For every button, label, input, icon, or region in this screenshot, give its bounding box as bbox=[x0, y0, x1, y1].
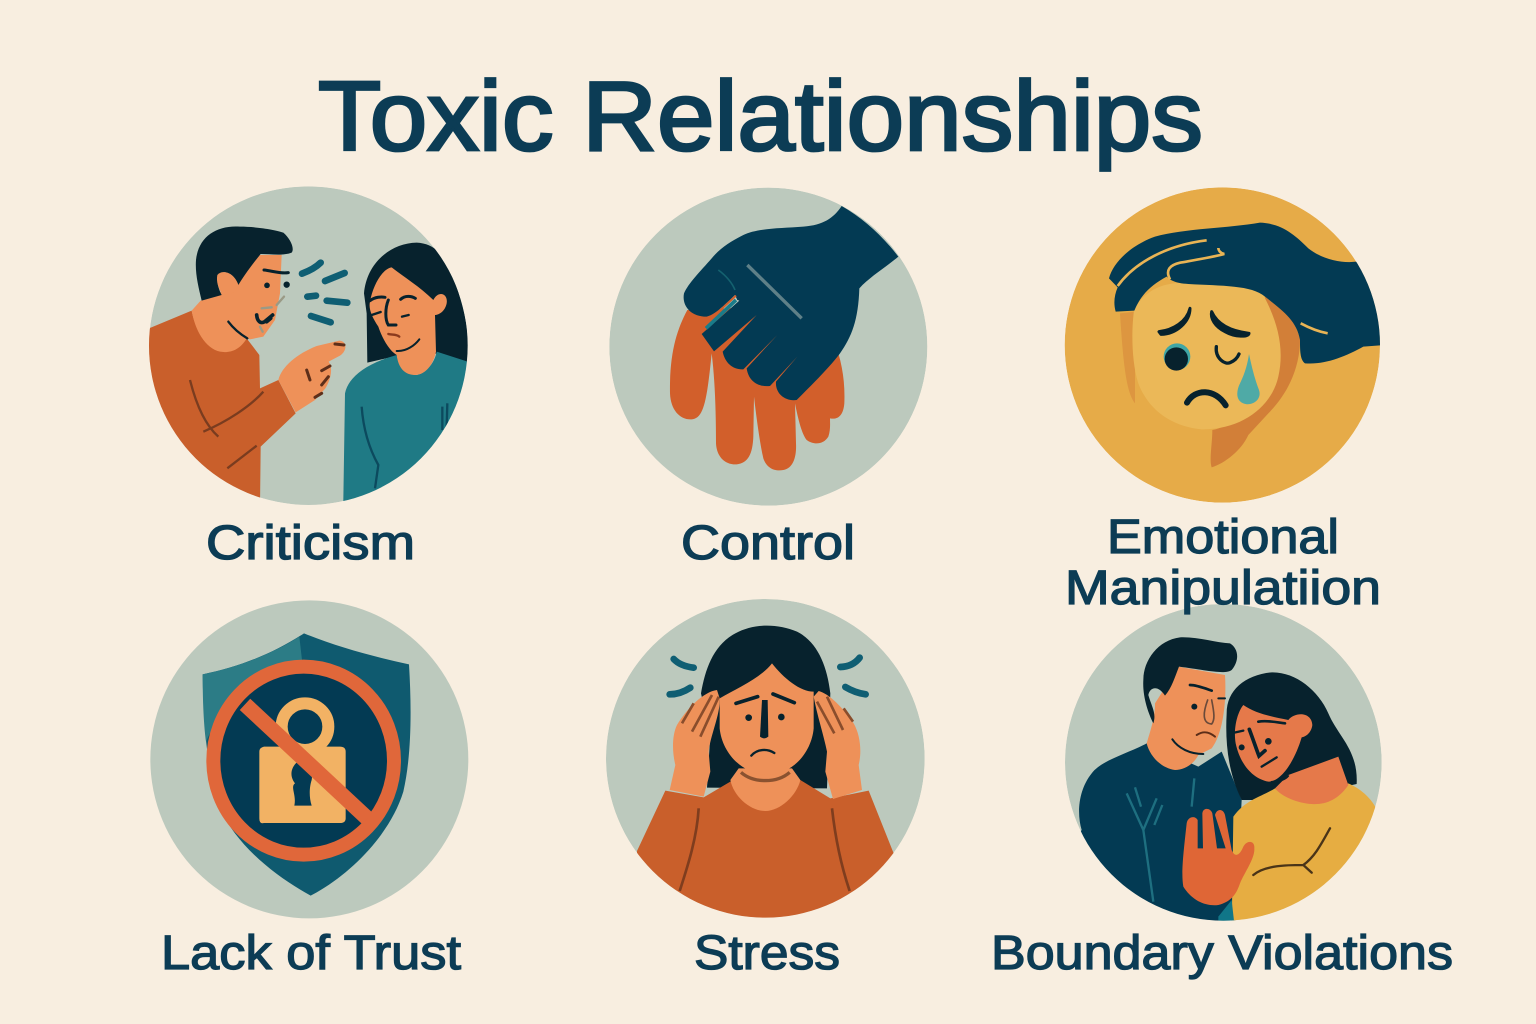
illustration: controlling hand over hand bbox=[609, 188, 927, 506]
finger lines bbox=[682, 695, 853, 737]
infographic canvas bbox=[149, 77, 1452, 980]
woman's shirt creases bbox=[362, 403, 447, 488]
man's hair bbox=[1143, 637, 1237, 723]
shield highlight bbox=[203, 637, 302, 742]
woman's face and neck bbox=[370, 267, 447, 375]
mouth bbox=[751, 750, 774, 756]
woman's features bbox=[1234, 721, 1288, 782]
jaw shadow bbox=[741, 772, 790, 781]
hand highlights bbox=[747, 265, 802, 318]
woman's hair bbox=[1226, 672, 1357, 800]
man's ear bbox=[217, 272, 238, 292]
man's sweater bbox=[1055, 743, 1242, 930]
panel: emotional manipulation bbox=[1065, 187, 1385, 615]
right hand bbox=[814, 691, 862, 799]
nose bbox=[760, 700, 768, 738]
brows bbox=[736, 694, 794, 703]
illustration: man pointing at woman bbox=[140, 186, 473, 508]
title: Toxic Relationships bbox=[318, 61, 1203, 171]
label: Lack of Trust bbox=[161, 927, 461, 980]
illustration: shield with crossed padlock bbox=[150, 600, 468, 918]
shirt creases bbox=[190, 380, 263, 468]
man's neck and face bbox=[1147, 667, 1225, 770]
teal shirt hem bbox=[1218, 900, 1235, 930]
woman's neck bbox=[1275, 757, 1348, 804]
tear bbox=[1237, 354, 1260, 404]
panel: control bbox=[609, 188, 927, 570]
sad face bbox=[1132, 283, 1281, 429]
label: Control bbox=[681, 517, 855, 570]
navy disc bbox=[213, 667, 394, 855]
woman's sweater bbox=[1232, 783, 1388, 930]
hair bbox=[701, 626, 830, 788]
prohibition sign bbox=[213, 667, 394, 855]
woman's sweater folds bbox=[1253, 828, 1330, 875]
speech marks bbox=[302, 263, 347, 322]
navy upper hand bbox=[684, 206, 898, 400]
man's face and neck bbox=[192, 255, 282, 352]
panel: stress bbox=[606, 599, 925, 980]
label: Emotional bbox=[1107, 511, 1339, 564]
frown bbox=[1187, 392, 1226, 405]
woman's face bbox=[1235, 705, 1312, 782]
panel: boundary violations bbox=[991, 604, 1453, 980]
stress marks bbox=[670, 658, 866, 694]
finger creases bbox=[307, 344, 344, 397]
eyebrows bbox=[1159, 308, 1249, 336]
man's facial features bbox=[228, 270, 289, 338]
panel: lack of trust bbox=[150, 600, 468, 980]
man's hair bbox=[196, 227, 293, 301]
man's sweater folds bbox=[1127, 778, 1194, 902]
shield bbox=[203, 633, 411, 896]
sleeve lines bbox=[680, 808, 850, 891]
left hand bbox=[670, 690, 720, 797]
face bbox=[720, 663, 814, 775]
finger lines bbox=[1118, 240, 1328, 333]
label: Criticism bbox=[206, 517, 415, 570]
face shadow bbox=[1120, 312, 1135, 403]
eyes bbox=[745, 714, 752, 721]
orange lower hand bbox=[670, 307, 844, 470]
label bbox=[1065, 511, 1381, 615]
padlock shackle bbox=[282, 703, 328, 750]
neck bbox=[730, 768, 800, 811]
label: Boundary Violations bbox=[991, 927, 1453, 980]
sweater bbox=[637, 780, 894, 925]
woman's features bbox=[370, 296, 419, 351]
keyhole bbox=[291, 760, 312, 806]
woman's hair bbox=[364, 243, 470, 363]
man's features bbox=[1172, 685, 1225, 754]
label: Stress bbox=[694, 927, 840, 980]
illustration: stressed woman holding head bbox=[606, 599, 925, 925]
navy hand over head bbox=[1109, 223, 1385, 364]
man's pointing hand bbox=[278, 341, 345, 412]
panel: criticism bbox=[140, 186, 473, 570]
padlock body bbox=[259, 747, 346, 823]
illustration: hand over crying face bbox=[1065, 187, 1385, 503]
illustration: couple with stop hand bbox=[1055, 604, 1388, 930]
eyes bbox=[1164, 343, 1190, 370]
woman's shirt bbox=[343, 352, 473, 508]
stop hand bbox=[1182, 809, 1254, 905]
label: Manipulatiion bbox=[1065, 562, 1381, 615]
man's shirt bbox=[140, 311, 296, 507]
